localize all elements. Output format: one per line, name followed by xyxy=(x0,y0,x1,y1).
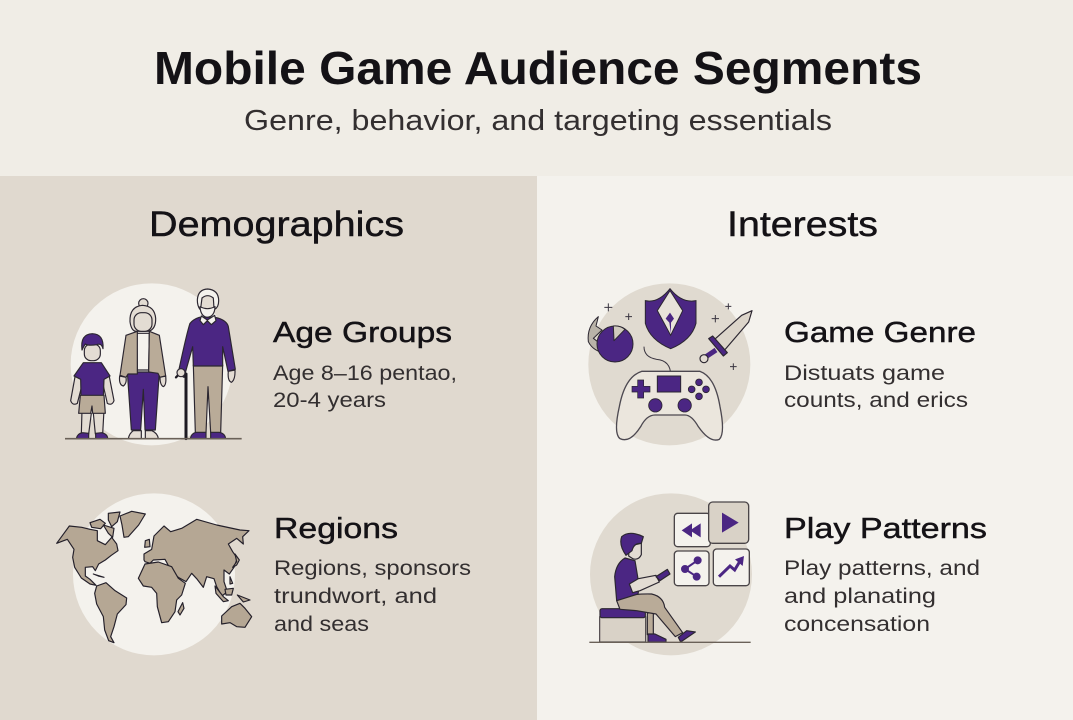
subtitle: Genre, behavior, and targeting essentials xyxy=(244,105,832,137)
text: age groups description: Age 8–16 pentao, xyxy=(273,362,457,385)
text: age groups description: 20-4 years xyxy=(273,389,386,412)
text: age groups description xyxy=(273,362,457,412)
label: game genre: Game Genre xyxy=(784,317,976,349)
australia xyxy=(222,603,252,627)
label: age groups: Age Groups xyxy=(273,317,452,349)
panel: demographics xyxy=(0,176,537,720)
text: game genre description xyxy=(784,362,968,412)
seated person xyxy=(600,533,695,642)
sparkles xyxy=(604,303,737,370)
text: regions description: Regions, sponsors xyxy=(274,557,471,580)
label: play patterns: Play Patterns xyxy=(784,513,987,545)
north america xyxy=(57,526,118,585)
title: Mobile Game Audience Segments xyxy=(154,42,922,94)
eurasia xyxy=(144,519,249,596)
madagascar xyxy=(178,603,184,615)
cuba xyxy=(93,574,104,577)
text: game genre description: counts, and erics xyxy=(784,389,968,412)
text: play patterns description: Play patterns, and xyxy=(784,557,980,580)
japan xyxy=(233,554,239,567)
grandmother figure xyxy=(119,299,166,439)
icon: play patterns xyxy=(589,493,752,655)
text: regions description: and seas xyxy=(274,613,369,636)
greenland xyxy=(120,511,145,537)
text: game genre description: Distuats game xyxy=(784,362,945,385)
pie orb xyxy=(588,317,633,362)
text: play patterns description: and planating xyxy=(784,585,936,608)
text: regions description xyxy=(274,557,471,636)
uk xyxy=(145,539,150,547)
africa xyxy=(138,562,185,623)
heading: demographics: Demographics xyxy=(149,205,404,244)
grandfather figure xyxy=(176,289,235,439)
sword xyxy=(700,311,752,363)
label: regions: Regions xyxy=(274,513,398,545)
controller xyxy=(616,371,723,440)
tiles xyxy=(674,502,749,586)
child figure xyxy=(71,334,114,439)
indonesia xyxy=(215,577,250,602)
icon: world map xyxy=(57,493,252,655)
canadian arctic xyxy=(90,512,120,537)
south america xyxy=(95,583,127,643)
text: play patterns description xyxy=(784,557,980,636)
shield xyxy=(645,289,696,349)
text: play patterns description: concensation xyxy=(784,613,930,636)
text: regions description: trundwort, and xyxy=(274,585,437,608)
panel: interests xyxy=(537,176,1073,720)
heading: interests: Interests xyxy=(727,205,878,244)
icon: game genre xyxy=(588,283,752,445)
icon: three generations xyxy=(65,283,242,445)
